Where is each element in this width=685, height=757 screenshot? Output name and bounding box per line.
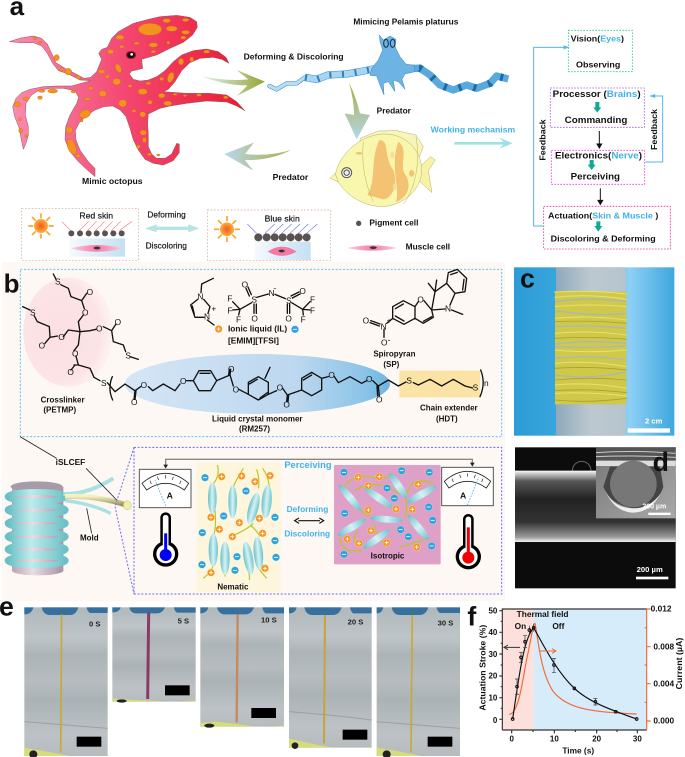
structure: PETMP xyxy=(23,274,138,388)
curve: actuation stroke xyxy=(511,624,638,720)
pigment cells, expanded xyxy=(254,233,311,241)
structure: spiropyran: N xyxy=(445,304,451,314)
illustration: sea snake xyxy=(269,35,508,95)
structure: ionic liquid: S xyxy=(286,295,292,305)
left axis tick labels: 50 xyxy=(488,607,498,616)
icon: thermometer, hot xyxy=(456,519,481,569)
arrow: right feedback loop xyxy=(645,95,663,162)
connector: current circuit xyxy=(166,459,472,467)
label: predator: Predator xyxy=(377,105,412,115)
photo d: SEM of fibre xyxy=(515,447,676,588)
panel: b, chemical components xyxy=(4,268,502,437)
skin layer xyxy=(254,242,311,260)
label: spiropyran xyxy=(373,350,416,369)
illustration: fibre on mold xyxy=(8,478,131,575)
structure: PETMP: O xyxy=(39,340,46,350)
legend: muscle cell: Muscle cell xyxy=(406,241,450,251)
nematic phase xyxy=(197,462,281,592)
structure: PETMP: S xyxy=(30,307,36,317)
icon: ammeter, hot: A xyxy=(460,491,467,501)
scale bar: main: 200 µm xyxy=(637,565,663,574)
flow: processor xyxy=(550,88,644,127)
label: crosslinker: Crosslinker xyxy=(41,395,85,404)
flow: actuation: Actuation(Skin & Muscle ) xyxy=(548,211,658,221)
icon: ammeter, cold: A xyxy=(167,491,174,501)
arrow: left axis xyxy=(504,645,520,650)
crosslinker highlight xyxy=(23,277,113,387)
scale bar: 2 cm xyxy=(628,417,670,433)
photo c: fibre wound on rod xyxy=(514,267,674,436)
panel: blue skin xyxy=(207,210,331,260)
photo 5 s xyxy=(112,607,196,703)
panel: a, mimic octopus biology xyxy=(9,0,344,260)
panel b background xyxy=(2,262,505,601)
left axis tick labels: 40 xyxy=(488,628,498,637)
photo 30 s: 30 S xyxy=(438,619,453,628)
pigment cells, contracted xyxy=(68,230,125,236)
structure: ionic liquid: - xyxy=(273,283,276,293)
label: thermal field: Thermal field xyxy=(517,609,569,619)
structure: PETMP: O xyxy=(82,307,89,317)
structure: ionic liquid xyxy=(191,278,315,333)
isotropic phase: Isotropic xyxy=(371,552,405,561)
label: crosslinker: (PETMP) xyxy=(43,405,76,414)
pointer line to iSLCEF xyxy=(20,437,117,533)
structure: spiropyran: N xyxy=(381,321,387,331)
illustration: mimic octopus xyxy=(9,15,245,177)
left axis tick labels: 20 xyxy=(488,671,498,680)
panels c and d: photographs xyxy=(514,264,676,588)
structure: ionic liquid: S xyxy=(251,295,257,305)
nematic phase: Nematic xyxy=(217,582,249,591)
left axis tick labels: 0 xyxy=(493,716,498,725)
photo 10 s xyxy=(200,607,284,728)
label: liquid crystal monomer xyxy=(212,414,303,434)
label: predator: Predator xyxy=(273,172,309,182)
flow: electronics: Perceiving xyxy=(571,172,620,182)
flow: processor: Commanding xyxy=(565,115,628,125)
structure: RM257 chain: O xyxy=(180,376,187,386)
heading: red skin: Red skin xyxy=(79,211,113,221)
structure: RM257 chain: O xyxy=(131,397,138,407)
label: chain extender: Chain extender xyxy=(420,404,478,413)
structure: ionic liquid: F xyxy=(301,315,306,325)
illustration: fish xyxy=(330,131,435,207)
label: on: On xyxy=(515,621,526,631)
chain extender highlight xyxy=(399,371,480,397)
structure: RM257 chain: O xyxy=(328,370,335,380)
legend: pigment cell: Pigment cell xyxy=(369,218,418,228)
flow: electronics xyxy=(551,150,645,184)
liquid crystal monomer highlight xyxy=(125,354,390,414)
label: spiropyran: (SP) xyxy=(383,360,400,369)
arrow: reversible phase change xyxy=(295,518,324,523)
structure: PETMP: S xyxy=(125,350,131,360)
panel letter f: f xyxy=(467,602,476,632)
panel: b, fibre winding and phase change xyxy=(8,437,502,594)
muscle cell, short xyxy=(268,247,297,256)
label: spiropyran: Spiropyran xyxy=(373,350,416,359)
label: mimic octopus: Mimic octopus xyxy=(82,176,143,186)
structure: RM257 chain: O xyxy=(233,384,240,394)
flow: processor: Processor (Brains) xyxy=(553,89,641,99)
scale bar: inset: 200 µm xyxy=(642,503,666,510)
right axis tick labels: 0.012 xyxy=(651,604,672,614)
label: discoloring: Discoloring xyxy=(146,241,187,251)
x axis tick labels: 30 xyxy=(633,735,642,744)
flow: vision: Vision(Eyes) xyxy=(571,33,624,43)
label: working mechanism: Working mechanism xyxy=(431,125,515,135)
panel letter b: b xyxy=(4,268,20,298)
isotropic phase xyxy=(334,465,441,564)
structure: spiropyran: O xyxy=(381,338,388,348)
background: thermal field on xyxy=(502,609,533,730)
structure: PETMP: O xyxy=(115,317,122,327)
structure: RM257 chain: O xyxy=(283,400,290,410)
structure: RM257 chain xyxy=(107,364,489,410)
structure: spiropyran xyxy=(363,269,467,348)
reflected blue light arrows xyxy=(247,224,317,233)
label: discoloring: Discoloring xyxy=(284,529,330,539)
photo 0 s xyxy=(24,607,108,757)
flow: electronics: Electronics(Nerve) xyxy=(555,151,642,161)
left axis title: Actuation Stroke (%) xyxy=(478,624,488,711)
label: mold: Mold xyxy=(80,533,99,542)
arrow: processor to electronics xyxy=(597,131,602,148)
structure: PETMP: O xyxy=(87,287,94,297)
label: perceiving: Perceiving xyxy=(284,460,332,470)
right axis tick labels: 0.000 xyxy=(653,716,675,726)
x axis tick labels: 20 xyxy=(592,735,602,744)
x axis title: Time (s) xyxy=(562,745,594,755)
skin layer xyxy=(69,238,125,257)
structure: RM257 chain: O xyxy=(141,380,148,390)
label: liquid crystal monomer: Liquid crystal monomer xyxy=(212,414,303,423)
photo 0 s: 0 S xyxy=(89,619,100,628)
icon: sun xyxy=(28,213,54,239)
label: ionic liquid: [EMIM][TFSI] xyxy=(228,335,279,345)
panel letter d: d xyxy=(653,447,669,477)
structure: spiropyran: - xyxy=(388,335,391,345)
arrow: electronics to actuation xyxy=(598,188,603,204)
structure: ionic liquid: F xyxy=(310,295,315,305)
label: deforming and discoloring: Deforming & Discoloring xyxy=(244,51,344,61)
structure: ionic liquid: N xyxy=(269,288,275,298)
icon: ammeter, cold xyxy=(139,469,191,508)
label: ionic liquid: Ionic liquid (IL) xyxy=(228,324,287,334)
arrow: snake to fish xyxy=(345,83,370,139)
legend: muscle cell xyxy=(347,241,450,251)
label: crosslinker xyxy=(41,395,85,414)
structure: ionic liquid: + xyxy=(211,304,216,314)
photo 20 s xyxy=(289,607,372,749)
x axis tick labels xyxy=(509,735,642,744)
photo 30 s xyxy=(377,607,460,757)
label: chain extender xyxy=(420,404,478,424)
label: liquid crystal monomer: (RM257) xyxy=(239,425,270,434)
structure: RM257 chain: S xyxy=(406,375,412,385)
photo 10 s: 10 S xyxy=(261,616,277,625)
structure: RM257 chain: S xyxy=(473,383,479,393)
panel letter c: c xyxy=(520,264,535,294)
photo 20 s: 20 S xyxy=(348,618,363,627)
left axis tick labels xyxy=(488,607,498,725)
structure: PETMP: S xyxy=(101,378,107,388)
right axis title: Current (µA) xyxy=(674,637,684,689)
label: ionic liquid xyxy=(228,324,287,345)
structure: RM257 chain: O xyxy=(376,395,383,405)
arrow: working mechanism xyxy=(454,138,513,149)
arrow: right axis xyxy=(540,649,556,653)
flow: actuation: Discoloring & Deforming xyxy=(551,234,656,244)
muscle cell, long xyxy=(71,245,123,252)
structure: PETMP: S xyxy=(55,277,61,287)
label: iSLCEF: iSLCEF xyxy=(56,457,85,467)
right axis tick labels: 0.008 xyxy=(653,641,675,651)
panel: e, photo time series xyxy=(0,592,460,757)
scale bar: 2 cm: 2 cm xyxy=(645,417,663,426)
structure: spiropyran: O xyxy=(363,315,370,325)
structure: PETMP: O xyxy=(67,367,74,377)
zoom outline xyxy=(115,447,502,594)
structure: spiropyran: + xyxy=(387,315,392,325)
arrow: reversible skin change xyxy=(145,224,199,232)
right axis tick labels xyxy=(651,604,675,726)
arrow: octopus to snake xyxy=(202,70,265,96)
dashed frame xyxy=(20,269,502,437)
structure: PETMP: O xyxy=(58,332,65,342)
label: right feedback: Feedback xyxy=(649,109,659,150)
axes and ticks xyxy=(499,609,647,733)
heading: blue skin: Blue skin xyxy=(265,214,300,224)
structure: RM257 chain: O xyxy=(366,374,373,384)
structure: ionic liquid: O xyxy=(242,279,249,289)
icon: sun xyxy=(214,216,240,242)
structure: ionic liquid: F xyxy=(227,305,232,315)
x axis tick labels: 0 xyxy=(509,735,514,744)
structure: RM257 chain: n xyxy=(484,378,489,388)
panel: f, actuation and current chart xyxy=(467,602,684,755)
structure: PETMP: O xyxy=(72,349,79,359)
scale bar: main xyxy=(636,565,668,579)
curve: current xyxy=(509,623,637,714)
structure: spiropyran: O xyxy=(417,295,424,305)
flow: vision: Observing xyxy=(576,60,620,70)
flow: vision xyxy=(568,30,632,72)
icon: ammeter, hot xyxy=(442,467,493,506)
reflected red light arrows xyxy=(62,221,132,231)
x axis tick labels: 10 xyxy=(550,735,559,744)
left axis tick labels: 10 xyxy=(488,693,498,702)
structure: ionic liquid: O xyxy=(285,314,292,324)
flow: actuation xyxy=(544,206,670,249)
structure: ionic liquid: F xyxy=(236,315,241,325)
right axis xyxy=(645,609,651,730)
label: off: Off xyxy=(552,621,565,631)
photo 5 s: 5 S xyxy=(178,617,189,626)
structure: ionic liquid: N xyxy=(204,311,210,321)
structure: RM257 chain: O xyxy=(277,383,284,393)
structure: ionic liquid: O xyxy=(251,314,258,324)
panel: a, snake, fish and working mechanism xyxy=(269,16,670,251)
label: chain extender: (HDT) xyxy=(436,415,458,424)
background: thermal field off xyxy=(533,609,647,730)
arrow: left feedback loop xyxy=(534,46,568,226)
label: deforming: Deforming xyxy=(147,210,186,220)
panel: red skin xyxy=(22,208,138,260)
structure: ionic liquid: F xyxy=(227,294,232,304)
structure: ionic liquid: F xyxy=(310,305,315,315)
structure: ionic liquid: N xyxy=(197,291,203,301)
label: mimicing pelamis platurus: Mimicing Pelamis platurus xyxy=(353,16,459,26)
label: left feedback: Feedback xyxy=(538,119,548,161)
right axis tick labels: 0.004 xyxy=(653,678,675,688)
scale bar: inset xyxy=(642,503,671,515)
arrow: predator back to octopus xyxy=(224,143,291,171)
left axis tick labels: 30 xyxy=(488,650,498,659)
label: deforming: Deforming xyxy=(287,504,328,514)
structure: PETMP: O xyxy=(96,323,103,333)
structure: ionic liquid: O xyxy=(299,286,306,296)
structure: RM257 chain: O xyxy=(228,364,235,374)
arrowheads on current circuit xyxy=(163,463,475,469)
icon: thermometer, cold xyxy=(153,518,178,567)
